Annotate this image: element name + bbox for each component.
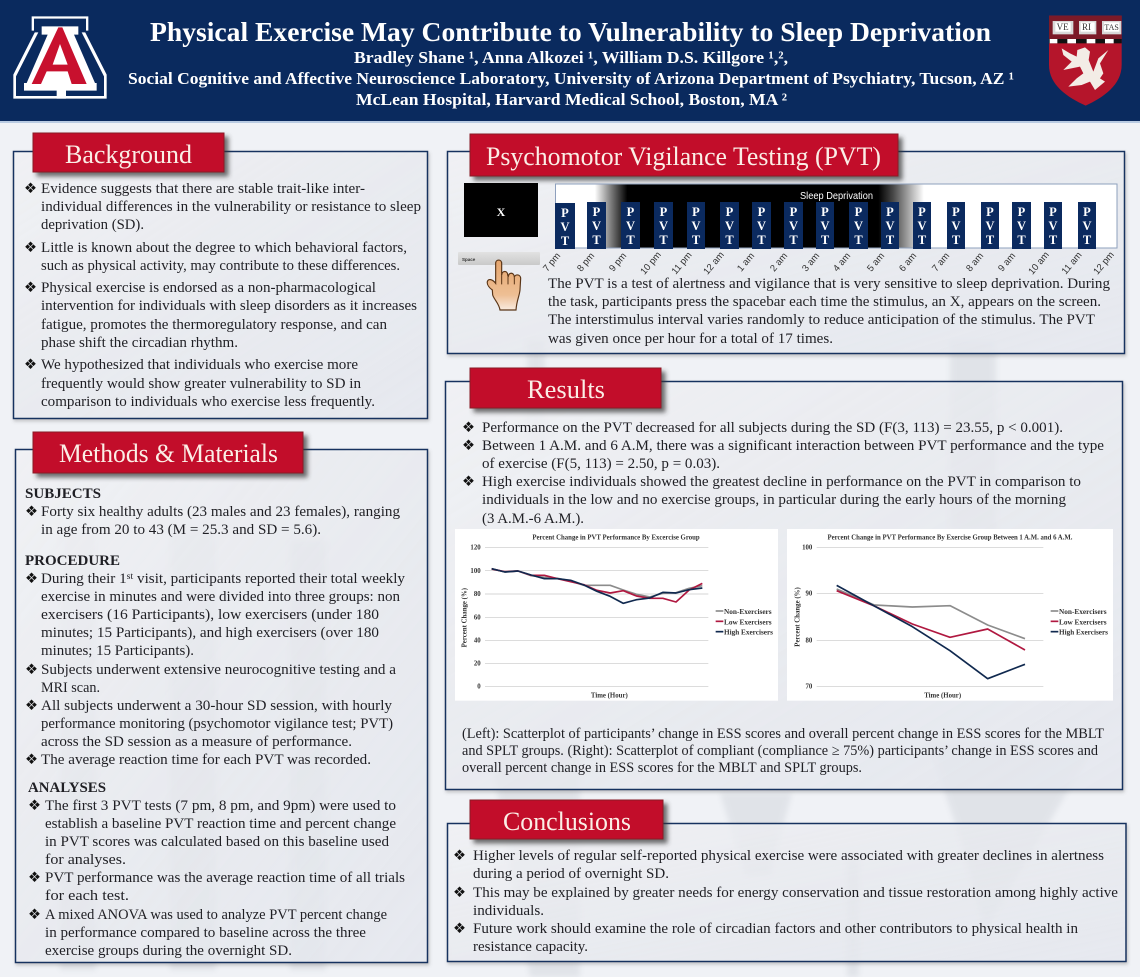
time axis labels: 12 pm <box>1091 250 1117 277</box>
PVT test markers: P <box>1083 205 1091 219</box>
heading: Methods & Materials: Methods & Materials <box>59 439 278 468</box>
text block: analyses: establish a baseline PVT reaction time and percent change <box>45 816 396 832</box>
line chart: percent change by exercise group: Percent Change (%) <box>462 588 469 647</box>
line chart: 1 A.M. to 6 A.M.: 70 <box>806 684 813 691</box>
text block: results bullets <box>462 420 1104 527</box>
PVT test markers: T <box>854 233 863 247</box>
PVT test markers: V <box>820 219 830 233</box>
text block: PVT description: The PVT is a test of alertness and vigilance that is very sensitive to sleep deprivation. During <box>548 276 1111 292</box>
logo: Harvard shield: VE <box>1057 22 1069 32</box>
PVT test markers: T <box>757 233 766 247</box>
PVT test markers: P <box>821 205 829 219</box>
heading: PVT: Psychomotor Vigilance Testing (PVT) <box>486 142 881 171</box>
legend <box>1051 609 1108 637</box>
panel: Background <box>14 133 428 418</box>
line chart: percent change by exercise group <box>455 529 778 701</box>
time axis labels: 8 am <box>964 251 986 274</box>
PVT test markers: V <box>659 219 668 233</box>
text block: background bullets: comparison to individuals who exercise less frequently. <box>41 394 375 410</box>
text block: background bullets: phase shift the circadian rhythm. <box>41 335 238 351</box>
text block: chart caption: (Left): Scatterplot of participants’ change in ESS scores and overall percent change in ESS scores for the MBLT <box>462 726 1104 742</box>
text block: conclusions bullets: ❖ <box>453 848 466 864</box>
PVT test markers: P <box>758 205 766 219</box>
PVT test markers: V <box>951 219 961 233</box>
panel: Psychomotor Vigilance Testing <box>448 134 1124 354</box>
heading: Results <box>470 368 661 408</box>
text block: conclusions bullets: ❖ <box>453 921 466 937</box>
text block: procedure: PROCEDURE <box>25 553 120 569</box>
stimulus screen: X <box>497 205 506 219</box>
text block: analyses: ANALYSES <box>28 780 106 796</box>
text block: procedure: exercisers (16 Participants), low exercisers (under 180 <box>41 607 379 623</box>
legend: Low Exercisers <box>724 619 772 626</box>
text block: background bullets: ❖ <box>24 280 37 296</box>
PVT test markers: T <box>918 233 927 247</box>
time axis labels: 11 pm <box>670 250 695 277</box>
logo: Harvard shield: RI <box>1082 22 1091 32</box>
text block: procedure: across the SD session as a measure of performance. <box>41 734 352 750</box>
text block: conclusions bullets: resistance capacity. <box>473 939 588 955</box>
text block: PVT description: the task, participants press the spacebar each time the stimulus, an X, appears on the screen. <box>548 294 1101 310</box>
PVT test markers <box>555 202 1096 249</box>
text block: results bullets: ❖ <box>462 438 475 454</box>
legend: Low Exercisers <box>1059 619 1107 626</box>
legend <box>716 609 773 637</box>
PVT test markers: T <box>1083 233 1092 247</box>
PVT test markers: P <box>692 205 700 219</box>
text block: conclusions bullets: Future work should examine the role of circadian factors and other contributors to physical health in <box>473 921 1079 937</box>
line chart: percent change by exercise group: 80 <box>474 591 481 598</box>
text block: analyses: in performance compared to baseline across the three <box>45 925 366 941</box>
PVT test markers: T <box>789 233 798 247</box>
panel: Conclusions <box>448 800 1126 962</box>
text block: analyses: in PVT scores was calculated based on this baseline used <box>45 834 390 850</box>
text block: results bullets: Between 1 A.M. and 6 A.M, there was a significant interaction between PVT performance and the type <box>482 438 1104 454</box>
text block: background bullets: Physical exercise is endorsed as a non-pharmacological <box>41 280 376 296</box>
text block: background bullets: individual differences in the vulnerability or resistance to sleep <box>41 199 421 215</box>
text block: conclusions bullets: ❖ <box>453 885 466 901</box>
PVT test markers: P <box>726 205 734 219</box>
text block: subjects: Forty six healthy adults (23 males and 23 females), ranging <box>41 504 401 520</box>
text block: results bullets: (3 A.M.-6 A.M.). <box>482 511 584 527</box>
stimulus screen <box>464 183 538 237</box>
text block: subjects: SUBJECTS <box>25 486 101 502</box>
text block: procedure: ❖ <box>25 571 38 587</box>
text block: analyses: PVT performance was the average reaction time of all trials <box>45 870 405 886</box>
text block: background bullets: Evidence suggests that there are stable trait-like inter- <box>41 181 365 197</box>
text block: background bullets: such as physical activity, may contribute to these differences. <box>41 258 400 274</box>
line chart: 1 A.M. to 6 A.M.: 90 <box>806 591 813 598</box>
text block: analyses: ❖ <box>28 907 41 923</box>
text block: procedure: ❖ <box>25 752 38 768</box>
text block: procedure: minutes; 15 Participants). <box>41 643 194 659</box>
text block: chart caption: overall percent change in ESS scores for the MBLT and SPLT groups. <box>462 760 862 776</box>
time axis labels: 6 am <box>897 251 919 274</box>
legend: Non-Exercisers <box>724 609 772 616</box>
PVT test markers: T <box>986 233 995 247</box>
text block: analyses: The first 3 PVT tests (7 pm, 8 pm, and 9pm) were used to <box>45 798 396 814</box>
text block: background bullets: ❖ <box>24 240 37 256</box>
PVT test markers: T <box>592 233 601 247</box>
PVT test markers: V <box>917 219 927 233</box>
PVT test markers: T <box>626 233 635 247</box>
timeline chart <box>541 184 1117 277</box>
line chart: 1 A.M. to 6 A.M.: Percent Change (%) <box>794 587 801 647</box>
time axis labels: 8 pm <box>575 251 597 274</box>
legend: High Exercisers <box>1059 630 1108 637</box>
text block: background bullets: ❖ <box>24 357 37 373</box>
PVT test markers: P <box>790 205 798 219</box>
text block: results bullets: ❖ <box>462 474 475 490</box>
text block: conclusions bullets: individuals. <box>473 903 544 919</box>
PVT test markers: V <box>757 219 766 233</box>
PVT test markers: P <box>886 205 894 219</box>
time axis labels: 10 am <box>1026 250 1052 277</box>
PVT test markers: T <box>1017 233 1026 247</box>
line chart: percent change by exercise group: Percent Change in PVT Performance By Excercise Group <box>532 535 700 542</box>
PVT test markers: T <box>821 233 830 247</box>
PVT test markers: T <box>692 233 701 247</box>
heading: Methods & Materials <box>33 432 303 473</box>
heading: Conclusions: Conclusions <box>503 807 631 836</box>
text block: conclusions bullets: This may be explained by greater needs for energy conservation and tissue restoration among highly active <box>473 885 1118 901</box>
line chart: 1 A.M. to 6 A.M. <box>787 529 1113 701</box>
timeline chart: Sleep Deprivation <box>800 191 873 202</box>
logo: Harvard shield <box>1049 16 1122 106</box>
logo: Harvard shield: TAS <box>1104 23 1119 32</box>
PVT test markers: P <box>918 205 926 219</box>
text block: chart caption: and SPLT groups. (Right): Scatterplot of compliant (compliance ≥ 75%) participants’ change in ESS scores and <box>462 743 1099 759</box>
text block: analyses: ❖ <box>28 798 41 814</box>
PVT test markers: V <box>1048 219 1058 233</box>
text block: procedure: Subjects underwent extensive neurocognitive testing and a <box>41 662 397 678</box>
text block: conclusions bullets: during a period of overnight SD. <box>473 866 669 882</box>
time axis labels: 12 am <box>701 250 727 277</box>
PVT test markers: V <box>626 219 635 233</box>
affiliation 1: Social Cognitive and Affective Neuroscience Laboratory, University of Arizona Department of Psychiatry, Tucson, AZ ¹ <box>128 69 1014 88</box>
text block: background bullets: We hypothesized that individuals who exercise more <box>41 357 358 373</box>
authors: Bradley Shane ¹, Anna Alkozei ¹, William D.S. Killgore ¹,², <box>354 48 788 67</box>
PVT test markers: T <box>561 234 570 248</box>
line chart: percent change by exercise group: 20 <box>474 661 481 668</box>
time axis labels <box>541 250 1117 277</box>
text block: procedure: exercise in minutes and were divided into three groups: non <box>41 589 401 605</box>
text block: results bullets: of exercise (F(5, 113) = 2.50, p = 0.03). <box>482 456 720 472</box>
PVT test markers: P <box>952 205 960 219</box>
text block: procedure: visit, participants reported their total weekly <box>133 571 406 587</box>
text block: procedure: All subjects underwent a 30-hour SD session, with hourly <box>41 698 393 714</box>
line chart: 1 A.M. to 6 A.M.: 100 <box>802 545 813 552</box>
text block: procedure <box>25 553 406 768</box>
PVT test markers: V <box>885 219 895 233</box>
text block: chart caption <box>462 726 1104 776</box>
heading: Conclusions <box>470 800 663 839</box>
line chart: percent change by exercise group: 0 <box>477 684 481 691</box>
title: Physical Exercise May Contribute to Vulnerability to Sleep Deprivation <box>150 16 991 47</box>
text block: background bullets <box>24 181 421 410</box>
text block: background bullets: frequently would show greater vulnerability to SD in <box>41 376 362 392</box>
heading: Background <box>33 133 224 172</box>
heading: PVT <box>470 134 898 176</box>
text block: results bullets: Performance on the PVT decreased for all subjects during the SD (F(3, 113) = 23.55, p < 0.001). <box>482 420 1063 436</box>
header banner <box>0 0 1140 123</box>
time axis labels: 9 pm <box>607 251 629 274</box>
PVT test markers: V <box>1082 219 1092 233</box>
text block: results bullets: individuals in the low and no exercise groups, in particular during the early hours of the morning <box>482 492 1067 508</box>
text block: results bullets: ❖ <box>462 420 475 436</box>
PVT test markers: P <box>660 205 668 219</box>
heading: Background: Background <box>65 140 192 169</box>
logo: University of Arizona block A <box>13 16 107 99</box>
text block: background bullets: deprivation (SD). <box>41 217 144 233</box>
PVT test markers: P <box>986 205 994 219</box>
time axis labels: 7 pm <box>541 251 563 274</box>
affiliation 2: McLean Hospital, Harvard Medical School, Boston, MA ² <box>356 90 787 109</box>
time axis labels: 1 am <box>735 251 757 274</box>
PVT test markers: T <box>725 233 734 247</box>
time axis labels: 11 am <box>1060 250 1085 277</box>
PVT test markers: P <box>1018 205 1026 219</box>
time axis labels: 5 am <box>865 251 887 274</box>
time axis labels: 2 am <box>768 251 790 274</box>
text block: analyses: for each test. <box>45 888 129 904</box>
line chart: 1 A.M. to 6 A.M.: Time (Hour) <box>924 693 961 700</box>
text block: PVT description: was given once per hour for a total of 17 times. <box>548 331 833 347</box>
panel: Results <box>446 368 1122 790</box>
PVT test markers: P <box>1049 205 1057 219</box>
text block: analyses: exercise groups during the overnight SD. <box>45 943 292 959</box>
PVT test markers: P <box>627 205 635 219</box>
text block: background bullets: ❖ <box>24 181 37 197</box>
text block: procedure: minutes; 15 Participants), and high exercisers (over 180 <box>41 625 379 641</box>
text block: background bullets: fatigue, promotes the thermoregulatory response, and can <box>41 317 388 333</box>
text block: procedure: During their 1 <box>41 571 124 587</box>
line chart: percent change by exercise group: Time (Hour) <box>591 693 628 700</box>
panel: Methods & Materials <box>16 432 428 962</box>
time axis labels: 3 am <box>800 251 822 274</box>
line chart: percent change by exercise group: 100 <box>470 568 481 575</box>
text block: procedure: performance monitoring (psychomotor vigilance test; PVT) <box>41 716 393 732</box>
time axis labels: 10 pm <box>638 250 664 277</box>
text block: conclusions bullets <box>453 848 1118 955</box>
PVT test markers: V <box>725 219 734 233</box>
time axis labels: 9 am <box>996 251 1018 274</box>
icon: spacebar: Space <box>462 257 476 262</box>
line chart: percent change by exercise group: 60 <box>474 614 481 621</box>
text block: analyses: A mixed ANOVA was used to analyze PVT percent change <box>45 907 387 923</box>
text block: background bullets: intervention for individuals with sleep disorders as it increases <box>41 298 417 314</box>
text block: procedure: The average reaction time for each PVT was recorded. <box>41 752 371 768</box>
PVT test markers: T <box>659 233 668 247</box>
text block: background bullets: Little is known about the degree to which behavioral factors, <box>41 240 407 256</box>
line chart: 1 A.M. to 6 A.M.: Percent Change in PVT Performance By Exercise Group Between 1 A.M. and 6 A.M. <box>827 535 1073 542</box>
text block: procedure: ❖ <box>25 662 38 678</box>
icon: pressing hand <box>487 260 521 310</box>
PVT test markers: P <box>593 205 601 219</box>
text block: procedure: st <box>127 572 134 582</box>
text block: analyses: for analyses. <box>45 852 126 868</box>
text block: procedure: MRI scan. <box>41 680 100 696</box>
text block: analyses <box>28 780 405 959</box>
heading: Results: Results <box>527 375 605 404</box>
PVT test markers: P <box>561 206 569 220</box>
PVT test markers: T <box>952 233 961 247</box>
line chart: percent change by exercise group: 120 <box>470 545 481 552</box>
PVT test markers: V <box>592 219 601 233</box>
PVT test markers: V <box>854 219 863 233</box>
PVT test markers: V <box>789 219 798 233</box>
time axis labels: 7 am <box>930 251 952 274</box>
icon: spacebar <box>458 252 540 265</box>
legend: Non-Exercisers <box>1059 609 1107 616</box>
PVT test markers: V <box>1017 219 1026 233</box>
PVT test markers: P <box>855 205 863 219</box>
text block: conclusions bullets: Higher levels of regular self-reported physical exercise were associated with greater declines in alertness <box>473 848 1104 864</box>
text block: PVT description <box>548 276 1111 347</box>
text block: results bullets: High exercise individuals showed the greatest decline in performance on the PVT in comparison to <box>482 474 1081 490</box>
PVT test markers: V <box>560 220 570 234</box>
line chart: 1 A.M. to 6 A.M.: 80 <box>806 637 813 644</box>
text block: PVT description: The interstimulus interval varies randomly to reduce anticipation of the stimulus. The PVT <box>548 312 1095 328</box>
text block: procedure: ❖ <box>25 698 38 714</box>
PVT test markers: V <box>985 219 995 233</box>
line chart: percent change by exercise group: 40 <box>474 637 481 644</box>
PVT test markers: V <box>691 219 701 233</box>
text block: subjects <box>25 486 401 538</box>
faint watermark shapes <box>60 340 1096 977</box>
text block: subjects: ❖ <box>25 504 38 520</box>
text block: subjects: in age from 20 to 43 (M = 25.3 and SD = 5.6). <box>41 522 321 538</box>
text block: analyses: ❖ <box>28 870 41 886</box>
PVT test markers: T <box>1049 233 1058 247</box>
legend: High Exercisers <box>724 630 773 637</box>
PVT test markers: T <box>886 233 895 247</box>
time axis labels: 4 am <box>831 251 853 274</box>
